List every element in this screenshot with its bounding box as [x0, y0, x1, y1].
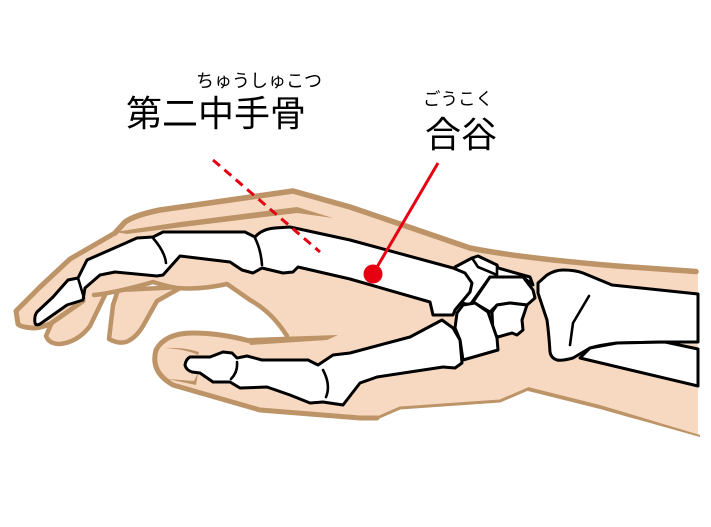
thumb and lower palm contour	[155, 333, 377, 418]
ring finger	[109, 287, 182, 343]
ulna	[580, 342, 698, 386]
back of hand contour	[115, 191, 696, 272]
red dashed line: second metacarpal pointer	[213, 160, 320, 252]
label: Goukoku: 合谷	[425, 114, 497, 155]
hand silhouette	[17, 191, 698, 435]
furigana: second metacarpal: ちゅうしゅこつ	[196, 71, 322, 91]
knuckle fold	[115, 207, 333, 234]
upper carpal	[450, 256, 533, 305]
trapezium	[455, 303, 498, 360]
thumb joints	[231, 362, 328, 397]
index finger contour	[16, 233, 115, 328]
second metacarpal and phalanges	[35, 227, 472, 325]
lower palm contour	[377, 389, 528, 418]
illustration: bones	[35, 227, 698, 405]
radius	[538, 270, 698, 360]
radius inner line	[570, 296, 589, 345]
carpal inner line	[472, 258, 497, 275]
thumb crease	[248, 335, 338, 345]
capitate	[473, 277, 535, 312]
little finger	[46, 292, 105, 344]
illustration: hand skin	[16, 191, 700, 437]
palm contour	[94, 282, 287, 336]
red pointer: Goukoku point	[364, 163, 438, 284]
thumb bones	[185, 320, 462, 405]
furigana: Goukoku: ごうこく	[423, 89, 493, 109]
index finger joints	[78, 238, 262, 298]
thumb nail creases	[165, 348, 199, 385]
label: second metacarpal: 第二中手骨	[126, 93, 306, 134]
wrist lower contour	[528, 387, 700, 437]
hamate	[492, 303, 527, 337]
